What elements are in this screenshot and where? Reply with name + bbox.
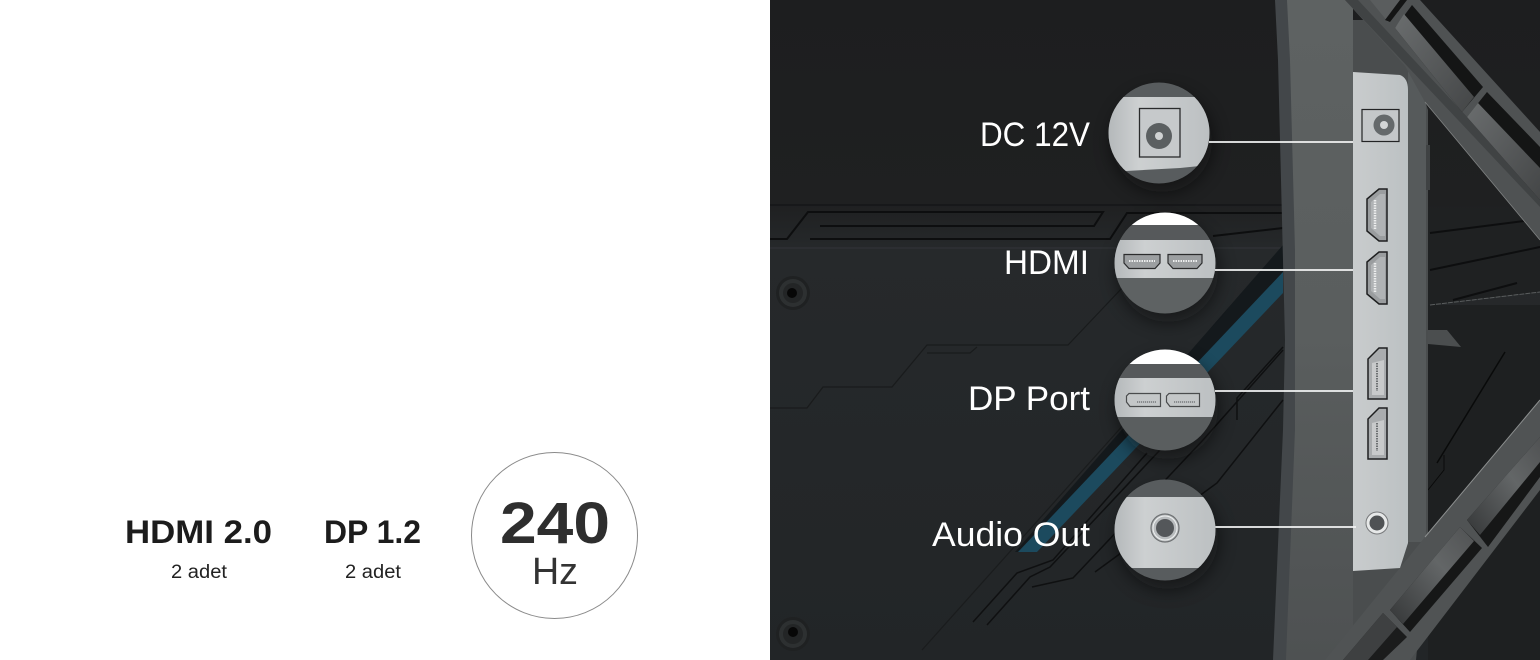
- callout: Audio Out: [932, 479, 1216, 581]
- port: HDMI lower: [1367, 252, 1387, 304]
- badge: 240 Hz refresh rate: Hz: [532, 551, 578, 593]
- lens shadows: [1112, 92, 1218, 589]
- blue diagonal accent stripe: [1015, 245, 1283, 552]
- port: DisplayPort upper: [1368, 348, 1387, 399]
- port: audio jack: [1366, 512, 1388, 534]
- callout: DP Port: [968, 349, 1216, 451]
- screws: [776, 276, 810, 651]
- curved monitor bezel: [1273, 0, 1430, 660]
- spec: DP 1.2: DP 1.2: [324, 514, 421, 550]
- callout: DC 12V: [980, 82, 1210, 184]
- callout: Audio Out: Audio Out: [932, 516, 1091, 554]
- rear shell traces: [770, 287, 1283, 650]
- callout: HDMI: [1004, 212, 1216, 314]
- port panel: [1353, 72, 1408, 571]
- leader lines: [1209, 142, 1356, 527]
- rear shell embossed band: [770, 205, 1283, 248]
- spec: HDMI 2.0: HDMI 2.0: [125, 514, 272, 550]
- callout: HDMI: HDMI: [1004, 244, 1089, 282]
- spec: HDMI 2.0: 2 adet: [171, 562, 228, 583]
- badge: 240 Hz refresh rate: [472, 452, 638, 618]
- spec: DP 1.2: [324, 514, 421, 583]
- port: DisplayPort lower: [1368, 408, 1387, 459]
- spec: HDMI 2.0: [125, 514, 272, 583]
- badge: 240 Hz refresh rate: 240: [500, 491, 610, 556]
- port: DC jack: [1362, 110, 1399, 142]
- lower stand bracket: [1325, 400, 1540, 660]
- callout: DP Port: DP Port: [968, 380, 1091, 418]
- panel: monitor rear view: [770, 0, 1540, 660]
- panel: white specification area: [0, 0, 770, 660]
- spec: DP 1.2: 2 adet: [345, 562, 402, 583]
- port: HDMI upper: [1367, 189, 1387, 241]
- upper stand bracket: [1345, 0, 1540, 240]
- callout: DC 12V: DC 12V: [980, 116, 1090, 154]
- rear shell right of stand: [1428, 208, 1540, 660]
